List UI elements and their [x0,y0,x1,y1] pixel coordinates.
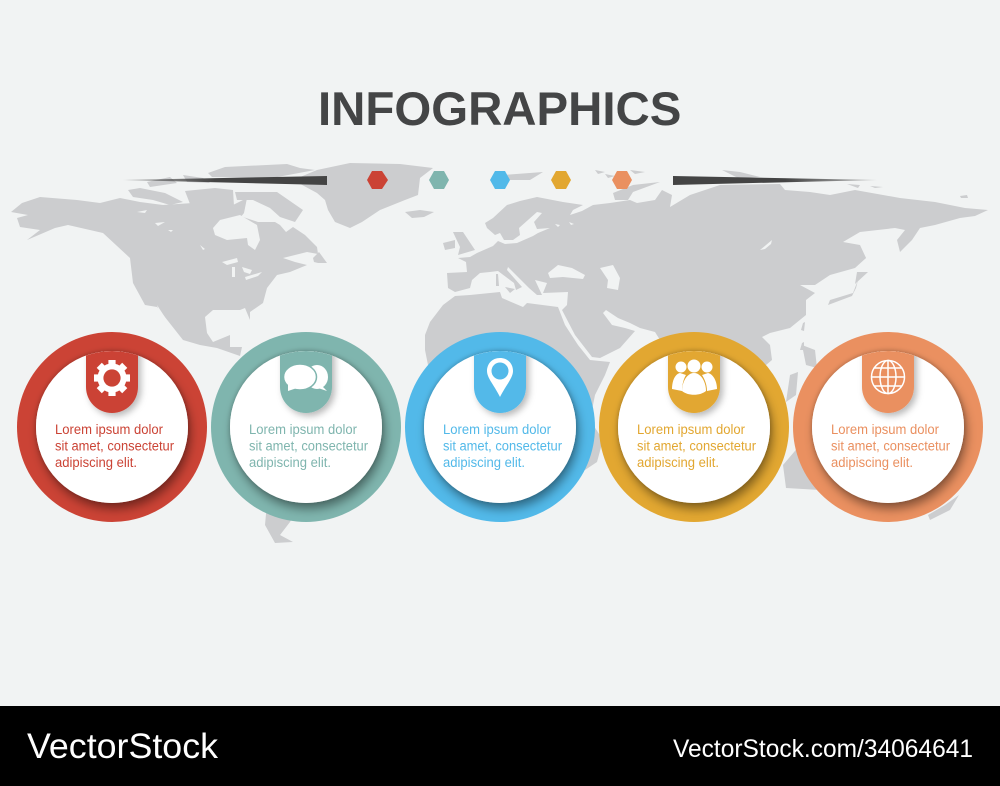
text: red [55,422,175,470]
text: blue: sit amet, consectetur [443,438,563,454]
world map [11,163,988,543]
icon: speech bubbles [284,364,328,391]
text: salmon [831,422,951,470]
text: salmon: adipiscing elit. [831,455,913,470]
hexagon: amber [551,171,571,189]
icon: location pin [487,358,513,397]
left spike [123,176,327,185]
icon: globe [872,360,904,394]
text: red: adipiscing elit. [55,455,137,470]
text: red: sit amet, consectetur [55,438,175,454]
footer url: VectorStock.com/34064641 [673,735,973,763]
icon: people [672,360,717,395]
text: teal: adipiscing elit. [249,455,331,470]
footer bar [0,706,1000,786]
text: salmon: Lorem ipsum dolor [831,422,940,437]
title: INFOGRAPHICS [318,83,681,136]
text: amber: sit amet, consectetur [637,438,757,454]
panel: blue pin [405,332,595,522]
hexagon: salmon [612,171,632,189]
text: salmon: sit amet, consectetur [831,438,951,454]
text: amber [637,422,757,470]
text: blue: Lorem ipsum dolor [443,422,552,437]
text: blue: adipiscing elit. [443,455,525,470]
text: amber: adipiscing elit. [637,455,719,470]
text: red: Lorem ipsum dolor [55,422,164,437]
hexagon: red [367,171,388,189]
hexagon: blue [490,171,510,189]
text: amber: Lorem ipsum dolor [637,422,746,437]
icon: gear [94,360,130,396]
panel: red gear [17,332,207,522]
panel: salmon globe [793,332,983,522]
panel: amber people [599,332,789,522]
text: teal [249,422,369,470]
right spike [673,176,877,185]
panel: teal chat [211,332,401,522]
text: teal: sit amet, consectetur [249,438,369,454]
text: teal: Lorem ipsum dolor [249,422,358,437]
hexagon: teal [429,171,449,189]
footer logo: VectorStock [27,727,219,766]
text: blue [443,422,563,470]
